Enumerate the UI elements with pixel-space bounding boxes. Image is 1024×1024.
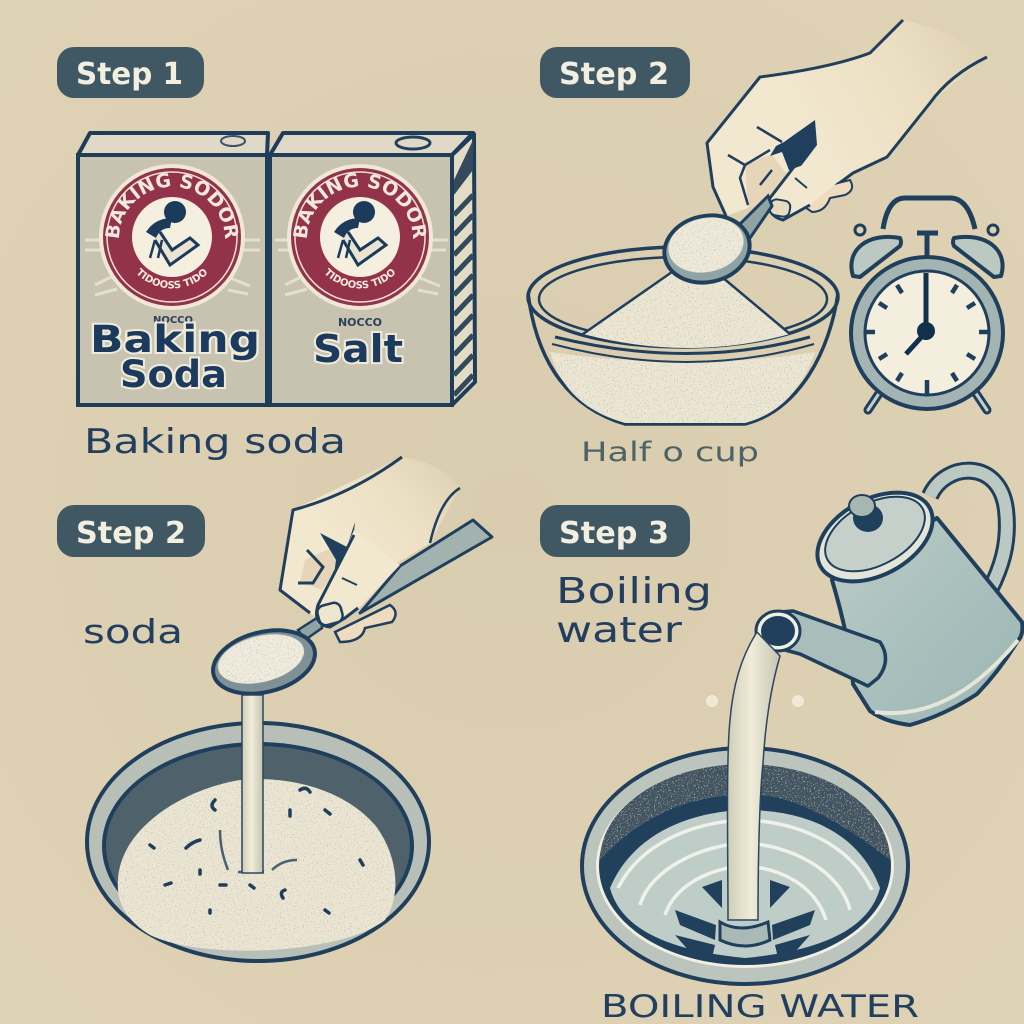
baking soda logo: TIDOOSS TIDO — [138, 268, 207, 289]
label boiling water: Boiling — [556, 571, 712, 612]
lower fingers — [335, 605, 396, 642]
hand and spoon lower — [206, 457, 492, 704]
water surface — [610, 810, 880, 958]
salt logo: TIDOOSS TIDO — [326, 268, 395, 289]
salt box: Salt — [313, 327, 403, 371]
drain collar — [720, 922, 770, 946]
kettle spout — [780, 611, 886, 686]
bowl of powder — [528, 247, 838, 424]
salt box: NOCCO — [338, 316, 382, 329]
baking soda logo — [99, 164, 245, 310]
baking soda box: Baking — [90, 318, 260, 361]
thumb — [316, 530, 400, 627]
falling soda stream — [242, 695, 263, 873]
palm shadow — [745, 155, 790, 208]
pouring water stream — [728, 632, 780, 920]
baking soda box — [76, 131, 270, 407]
step 1 badge: Step 1 — [76, 57, 183, 92]
step 1 badge — [57, 47, 204, 98]
salt logo: BAKING SODOR — [293, 173, 426, 240]
palm shadow — [300, 545, 340, 590]
hand and spoon top — [658, 20, 987, 290]
water droplets — [706, 695, 804, 707]
kettle lid — [802, 474, 948, 600]
step 2 badge top — [540, 47, 690, 98]
thumb — [769, 155, 850, 220]
label soda: soda — [83, 612, 183, 651]
spoon handle — [738, 196, 772, 238]
drain with grate — [582, 748, 908, 984]
label boiling water bottom: BOILING WATER — [601, 989, 919, 1024]
step 2 badge lower: Step 2 — [76, 516, 186, 551]
label half cup: Half o cup — [581, 437, 759, 468]
grate slots — [675, 880, 815, 958]
baking soda box: Soda — [120, 353, 227, 396]
step 3 badge — [540, 505, 690, 557]
step 2 badge lower — [57, 505, 205, 557]
salt logo — [287, 164, 433, 310]
salt box — [269, 131, 477, 408]
drain with baking soda — [87, 723, 429, 961]
kettle body — [832, 518, 1022, 725]
fingers gap — [320, 522, 355, 590]
powder pile — [118, 779, 395, 951]
powder in bowl — [550, 352, 815, 423]
lower fingers — [802, 180, 852, 212]
spoon bowl — [206, 620, 322, 704]
fingers gap — [770, 120, 817, 178]
label baking soda: Baking soda — [84, 422, 346, 462]
step 3 badge: Step 3 — [559, 516, 669, 551]
spoon handle — [360, 520, 492, 613]
alarm clock — [851, 198, 1003, 410]
baking soda logo: BAKING SODOR — [105, 173, 238, 240]
infographic canvas: water — [556, 610, 682, 651]
kettle knob — [853, 504, 883, 532]
step 2 badge top: Step 2 — [559, 57, 669, 92]
spoon bowl — [658, 208, 756, 290]
powder mound — [583, 272, 790, 348]
baking soda box: NOCCO — [153, 315, 193, 326]
kettle — [756, 471, 1022, 725]
